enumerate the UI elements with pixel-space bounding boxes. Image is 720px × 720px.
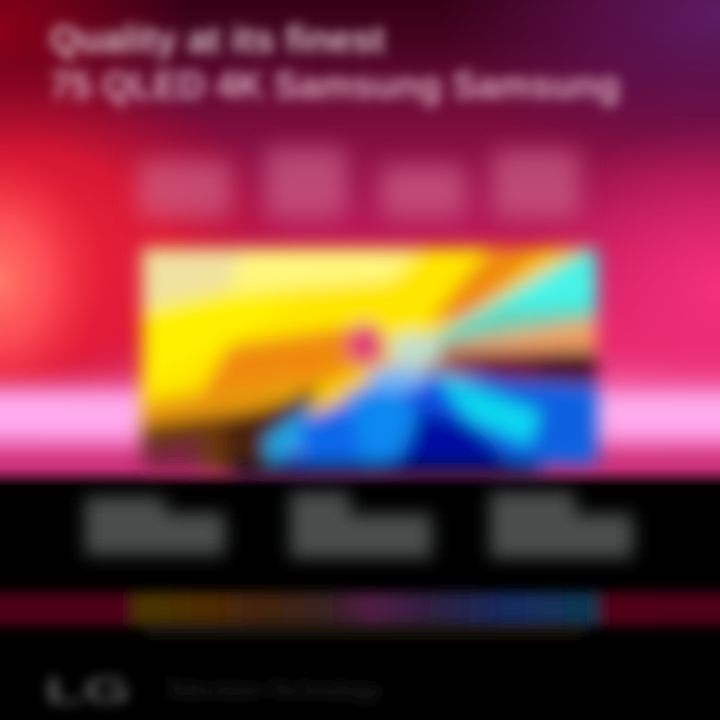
- footer logo: LG: [45, 670, 131, 711]
- reflection strip: [0, 592, 720, 636]
- badge 1: [138, 160, 232, 218]
- title: [50, 19, 620, 107]
- screen image: [142, 248, 597, 478]
- television: [142, 248, 597, 478]
- right rays: [420, 248, 597, 345]
- stat 2: [290, 492, 432, 558]
- footer text: Television Technology: [165, 677, 380, 704]
- badge 4: [492, 150, 580, 218]
- stats row: [85, 492, 633, 558]
- right base: [400, 300, 597, 400]
- title: Quality at its finest: [50, 19, 385, 61]
- title: 75 QLED 4K Samsung Samsung: [50, 65, 620, 107]
- badge 2: [265, 148, 347, 218]
- warm area: [142, 248, 597, 464]
- centre: [347, 323, 385, 367]
- stat 1: [85, 497, 225, 555]
- badge 3: [380, 165, 466, 218]
- feature badges: [138, 148, 580, 218]
- stat 3: [490, 492, 633, 558]
- blue rays: [430, 372, 540, 445]
